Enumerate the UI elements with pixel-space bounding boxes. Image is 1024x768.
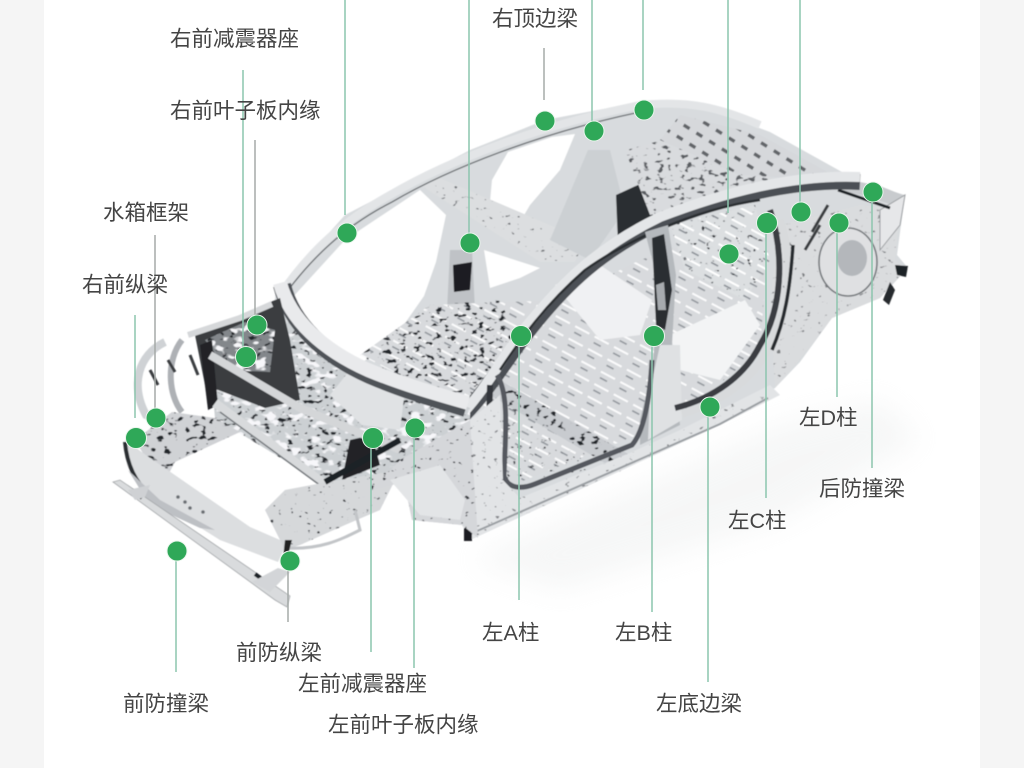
label: 右前纵梁: 右前纵梁 [82,273,168,297]
label: 左前减震器座: 左前减震器座 [298,672,427,696]
label: 左B柱: 左B柱 [615,621,672,645]
top leader lines [345,0,800,235]
front rail right side [135,412,240,475]
left front tower and rail [265,470,400,550]
label: 右前叶子板内缘: 右前叶子板内缘 [170,99,321,123]
far-side door texture and roof crossbeam [420,178,585,262]
far-side windows [490,134,575,222]
windshield opening [292,190,446,366]
left front wheel arch and hinge pillar [372,420,478,538]
label: 左底边梁: 左底边梁 [656,692,742,716]
cabin floor through doors [360,215,770,490]
rear parcel shelf [660,115,860,190]
label: 后防撞梁: 后防撞梁 [819,477,905,501]
rear wheel arch and quarter [770,205,905,388]
label: 左C柱: 左C柱 [728,509,787,533]
windshield lower A-pillar band [282,285,466,408]
label: 左A柱: 左A柱 [482,621,539,645]
rocker lower edge [468,398,768,535]
left-side leader lines [135,70,255,418]
label: 左前叶子板内缘: 左前叶子板内缘 [328,713,479,737]
radiator frame [138,342,176,428]
rear underbody and far-side body shell [270,102,908,540]
near B-pillar [640,225,680,445]
far B-pillar [446,250,476,340]
label: 前防撞梁: 前防撞梁 [123,692,209,716]
roof rail far side [278,104,760,298]
green marker dots [126,100,883,571]
right front rail [210,355,400,450]
bottom leader lines [176,340,708,682]
label: 左D柱: 左D柱 [799,406,858,430]
near-side roof arch [464,181,860,414]
trunk rail and rear crash beam [838,178,905,205]
near C-pillar arch [675,210,779,408]
label: 水箱框架: 水箱框架 [103,201,189,225]
firewall and engine bay [212,310,470,490]
right leader lines [766,195,872,498]
car body-in-white [113,102,908,607]
right fender apron and shock tower [195,298,300,408]
label: 右前减震器座: 右前减震器座 [170,27,299,51]
label: 右顶边梁: 右顶边梁 [492,7,578,31]
far pillars behind the rear window [550,150,625,260]
label: 前防纵梁: 前防纵梁 [236,641,322,665]
front crash beam [113,480,290,607]
front cross member [125,440,287,562]
ground shadow [470,400,920,590]
near A-pillar lower and sill [497,360,652,487]
bright rear floor panels [555,265,652,340]
